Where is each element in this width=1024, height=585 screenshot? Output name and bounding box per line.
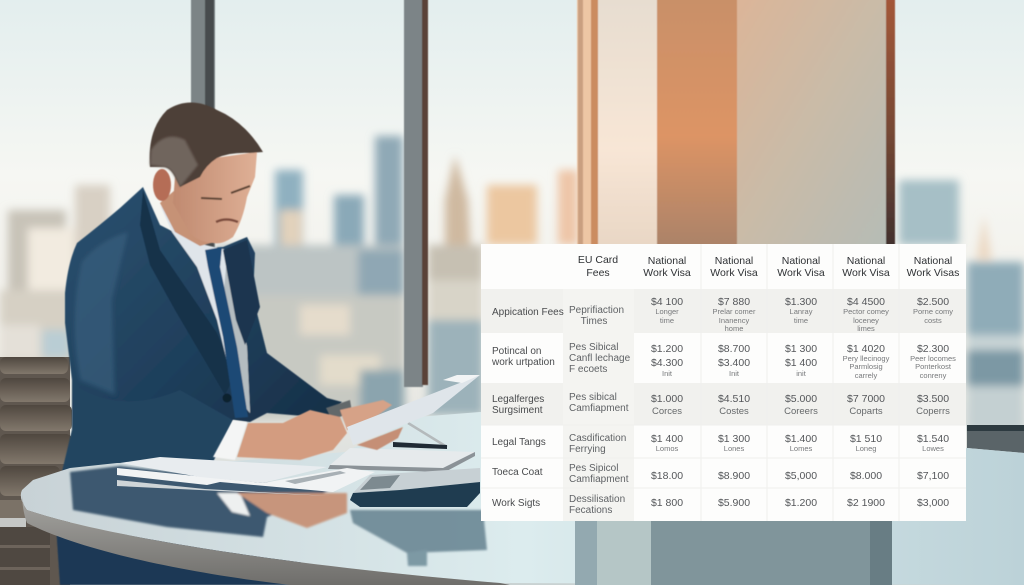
blurred city skyline bbox=[0, 136, 1024, 432]
far hand bbox=[340, 400, 392, 430]
row: potential on work urbanization: conreny bbox=[920, 371, 947, 380]
jacket button bbox=[222, 394, 232, 402]
row: potential on work urbanization: $3.400 bbox=[718, 357, 750, 369]
row: legal charges: Coparts bbox=[849, 406, 883, 417]
table header: National bbox=[782, 255, 820, 267]
row: total cost: Pes Sipicol bbox=[569, 463, 618, 474]
row: work sights: Fecations bbox=[569, 505, 612, 516]
row: application fees: Porne comy bbox=[913, 307, 953, 316]
table header: National bbox=[847, 255, 885, 267]
row: potential on work urbanization: Pes Sibical bbox=[569, 342, 618, 353]
near shirt cuff bbox=[213, 420, 247, 460]
row: legal charges: $1.000 bbox=[651, 393, 683, 405]
row: application fees: $4 100 bbox=[651, 296, 683, 308]
row: potential on work urbanization: work urtpation bbox=[491, 357, 555, 368]
row: legal tangs: Casdification bbox=[569, 433, 626, 444]
row: potential on work urbanization: Ponterkost bbox=[915, 362, 952, 371]
table header: National bbox=[648, 255, 686, 267]
table header bbox=[578, 254, 959, 279]
row: application fees: Longer bbox=[655, 307, 679, 316]
document held in hand bbox=[347, 375, 480, 445]
row: application fees: limes bbox=[857, 324, 875, 333]
row: application fees: Prelar comer bbox=[713, 307, 756, 316]
row: application fees: Peprifiaction bbox=[569, 305, 624, 316]
row: legal tangs: Lomes bbox=[790, 444, 813, 453]
row: legal charges: $3.500 bbox=[917, 393, 949, 405]
row: application fees: costs bbox=[924, 316, 942, 325]
right lapel bbox=[223, 240, 260, 345]
row: potential on work urbanization: Init bbox=[729, 369, 740, 378]
row: legal tangs: Lomos bbox=[656, 444, 679, 453]
row: total cost bbox=[492, 463, 949, 485]
row: potential on work urbanization: Potincal on bbox=[492, 346, 541, 357]
near hand bbox=[237, 410, 347, 460]
papers on desk bbox=[117, 457, 375, 496]
row: legal tangs: Ferrying bbox=[569, 444, 606, 455]
arm highlight bbox=[74, 232, 128, 395]
row: potential on work urbanization: $8.700 bbox=[718, 343, 750, 355]
row: application fees: Inanency bbox=[719, 316, 749, 325]
row: potential on work urbanization: init bbox=[796, 369, 807, 378]
far hand below paper bbox=[357, 427, 403, 450]
row: legal tangs: $1 300 bbox=[718, 433, 750, 445]
row: potential on work urbanization: Parmlosig bbox=[849, 362, 883, 371]
row: work sights: Dessilisation bbox=[569, 494, 625, 505]
row: application fees: Appication Fees bbox=[492, 307, 564, 318]
row: total cost: Camfiapment bbox=[569, 474, 629, 485]
far cuff and watch bbox=[326, 400, 352, 420]
row: work sights: $5.900 bbox=[718, 497, 750, 509]
comparison table bbox=[481, 244, 966, 521]
row: potential on work urbanization bbox=[491, 342, 956, 380]
row: legal tangs: $1 400 bbox=[651, 433, 683, 445]
tie bbox=[205, 247, 248, 418]
table header: Work Visas bbox=[907, 267, 959, 279]
table header: Work Visa bbox=[710, 267, 758, 279]
row: application fees: $2.500 bbox=[917, 296, 949, 308]
row: legal tangs bbox=[492, 433, 949, 455]
row: potential on work urbanization: $1 300 bbox=[785, 343, 817, 355]
table row shading bbox=[481, 244, 966, 521]
row: legal charges: Camfiapment bbox=[569, 403, 629, 414]
row: legal charges: Corces bbox=[652, 406, 682, 417]
face bbox=[173, 152, 257, 243]
row: legal charges: Costes bbox=[719, 406, 749, 417]
row: potential on work urbanization: carrely bbox=[855, 371, 877, 380]
row: potential on work urbanization: $2.300 bbox=[917, 343, 949, 355]
row: work sights: $2 1900 bbox=[847, 497, 885, 509]
table text bbox=[491, 254, 959, 516]
row: legal charges: Coreers bbox=[784, 406, 818, 417]
row: total cost: $7,100 bbox=[917, 470, 949, 482]
lower jacket under desk bbox=[56, 525, 315, 585]
hair bbox=[150, 102, 263, 187]
window frames bbox=[191, 0, 215, 250]
row: legal charges: Surgsiment bbox=[492, 405, 543, 416]
jacket bbox=[62, 187, 342, 472]
table header: Work Visa bbox=[643, 267, 691, 279]
row: legal charges: $4.510 bbox=[718, 393, 750, 405]
row: work sights: $1 800 bbox=[651, 497, 683, 509]
row: potential on work urbanization: Peer locomes bbox=[910, 354, 956, 363]
row: potential on work urbanization: Init bbox=[662, 369, 673, 378]
row: legal charges: Coperrs bbox=[916, 406, 950, 417]
hands and cuffs bbox=[213, 400, 403, 460]
row: application fees bbox=[492, 296, 953, 333]
shirt bbox=[160, 205, 250, 413]
table header: EU Card bbox=[578, 254, 618, 266]
row: legal tangs: Legal Tangs bbox=[492, 437, 546, 448]
row: legal charges: $5.000 bbox=[785, 393, 817, 405]
row: potential on work urbanization: $1 400 bbox=[785, 357, 817, 369]
row: total cost: $18.00 bbox=[651, 470, 683, 482]
row: legal tangs: $1.540 bbox=[917, 433, 949, 445]
desk reflection bbox=[70, 466, 487, 566]
row: potential on work urbanization: Canfl lechage bbox=[569, 353, 631, 364]
row: potential on work urbanization: F ecoets bbox=[569, 364, 607, 375]
man bbox=[56, 102, 342, 585]
ear bbox=[153, 169, 171, 201]
row: potential on work urbanization: $1.200 bbox=[651, 343, 683, 355]
row: legal tangs: $1.400 bbox=[785, 433, 817, 445]
row: legal charges: Legalferges bbox=[492, 394, 544, 405]
row: application fees: $1.300 bbox=[785, 296, 817, 308]
notebook on desk bbox=[328, 448, 475, 472]
neck bbox=[160, 190, 222, 246]
row: application fees: Lanray bbox=[790, 307, 813, 316]
table header: National bbox=[715, 255, 753, 267]
row: legal tangs: Lones bbox=[724, 444, 744, 453]
row: application fees: $7 880 bbox=[718, 296, 750, 308]
calculator bbox=[350, 468, 480, 507]
row: application fees: time bbox=[660, 316, 674, 325]
row: potential on work urbanization: Pery llecinogy bbox=[843, 354, 890, 363]
table header: Work Visa bbox=[777, 267, 825, 279]
table header: Fees bbox=[586, 267, 610, 279]
row: application fees: Pector comey bbox=[843, 307, 889, 316]
row: total cost: $5,000 bbox=[785, 470, 817, 482]
table header: National bbox=[914, 255, 952, 267]
row: application fees: loceney bbox=[853, 316, 879, 325]
row: legal charges: Pes sibical bbox=[569, 392, 617, 403]
row: total cost: $8.000 bbox=[850, 470, 882, 482]
row: work sights: $1.200 bbox=[785, 497, 817, 509]
sleeve shadow bbox=[62, 385, 233, 472]
row: application fees: Times bbox=[581, 316, 607, 327]
row: legal tangs: Lowes bbox=[922, 444, 944, 453]
row: work sights bbox=[492, 494, 949, 516]
row: total cost: Toeca Coat bbox=[492, 467, 543, 478]
row: application fees: home bbox=[725, 324, 743, 333]
row: legal charges bbox=[492, 392, 950, 417]
row: legal charges: $7 7000 bbox=[847, 393, 885, 405]
row: potential on work urbanization: $4.300 bbox=[651, 357, 683, 369]
row: legal tangs: $1 510 bbox=[850, 433, 882, 445]
wall panels bbox=[191, 0, 895, 387]
row: application fees: $4 4500 bbox=[847, 296, 885, 308]
chair bbox=[0, 357, 72, 585]
lapel bbox=[140, 190, 235, 395]
row: work sights: Work Sigts bbox=[492, 498, 540, 509]
desk: glass surface bbox=[21, 412, 1024, 585]
desk front edge bbox=[22, 492, 510, 585]
row: potential on work urbanization: $1 4020 bbox=[847, 343, 885, 355]
table header: Work Visa bbox=[842, 267, 890, 279]
row: work sights: $3,000 bbox=[917, 497, 949, 509]
row: total cost: $8.900 bbox=[718, 470, 750, 482]
row: legal tangs: Loneg bbox=[856, 444, 876, 453]
row: application fees: time bbox=[794, 316, 808, 325]
pen bbox=[393, 423, 447, 449]
